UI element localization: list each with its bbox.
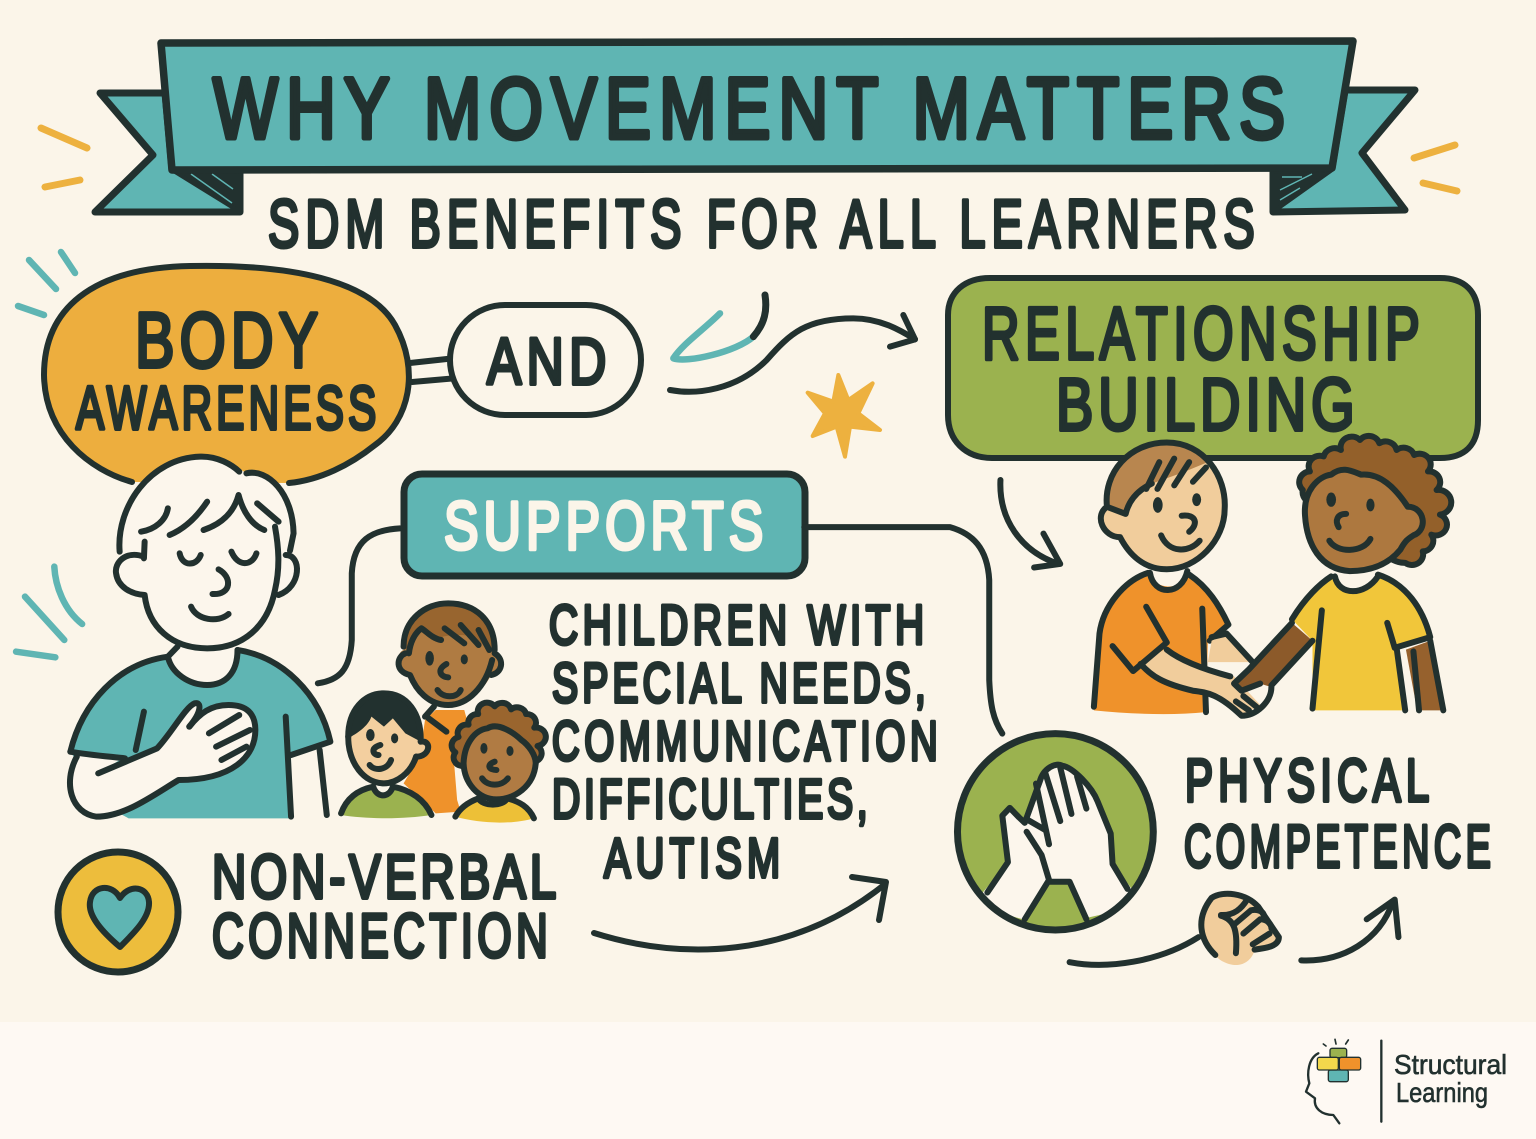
text block: who it supports: AUTISM [604,827,780,890]
arrow: connection to physical competence [594,877,886,949]
text block: who it supports: DIFFICULTIES, [552,768,868,831]
arm and hand [70,703,255,817]
decorative swoosh [673,295,766,360]
panel: supports label [404,474,805,576]
icon: head and blocks [1306,1039,1381,1123]
illustration: group of children [341,603,546,823]
heading: relationship: RELATIONSHIP [982,292,1420,375]
text block: non-verbal connection: CONNECTION [212,902,548,971]
text block: who it supports [549,595,938,890]
wordmark: Structural [1394,1049,1507,1080]
connector: body to and [410,358,458,382]
text block: non-verbal connection [212,842,556,971]
icon: star [808,375,880,457]
hands outline [987,765,1128,919]
text block: physical competence: COMPETENCE [1184,813,1491,880]
text block: who it supports: CHILDREN WITH [549,595,924,657]
arms and hands [1208,634,1253,662]
logo: structural learning [1306,1039,1507,1123]
logo: structural learning: Learning [1396,1077,1488,1108]
arm lines [70,703,255,817]
head [116,457,298,648]
right child shirt [455,798,534,823]
left child head [1101,442,1225,569]
arrow: physical competence up [1301,900,1398,960]
decorative sparks around the banner [41,128,1457,191]
label: supports: SUPPORTS [444,487,763,564]
heading: body: BODY [135,296,318,384]
right child features and outline [1292,514,1443,710]
shirt [70,650,330,818]
orange shirt [404,710,468,813]
right child hair [452,703,546,771]
arrow: and to relationship [670,315,915,392]
text block: who it supports: COMMUNICATION [552,711,938,773]
illustration: boy with hand on heart [16,457,330,818]
connector: supports to physical competence [804,527,1002,734]
teal sparks near body awareness [18,252,75,315]
right child head [1305,470,1423,571]
panel: relationship building [948,278,1478,458]
arrow: relationship to children [1000,480,1060,567]
neck [168,640,237,685]
right child right arm [1406,641,1443,710]
right child hair [1299,436,1451,565]
subtitle: SDM BENEFITS FOR ALL LEARNERS [268,186,1255,262]
right child shirt [1292,575,1430,710]
heading: building: BUILDING [1056,363,1355,446]
big child head [398,603,502,705]
text block: physical competence [1184,747,1491,880]
text block: physical competence: PHYSICAL [1185,747,1429,814]
connector: supports to boy [318,528,400,683]
heading: awareness: AWARENESS [76,375,376,443]
illustration: handshake children [1094,436,1451,716]
text block: who it supports: SPECIAL NEEDS, [552,652,926,715]
right child face [464,726,536,799]
text block: non-verbal connection: NON-VERBAL [212,842,556,911]
panel: body awareness bubble [44,266,409,483]
left child shirt [1094,573,1228,714]
icon: raised hands badge [957,734,1153,930]
label: and: AND [487,324,606,398]
icon: fist with line [1070,894,1279,965]
title: WHY MOVEMENT MATTERS [213,61,1285,157]
boy face and shirt lines [70,457,330,817]
banner [95,41,1415,212]
icon: heart badge [58,852,178,972]
panel: and pill [450,305,641,415]
left child shirt [341,787,431,818]
sparks: left of boy [16,567,82,657]
left child head [348,693,428,783]
